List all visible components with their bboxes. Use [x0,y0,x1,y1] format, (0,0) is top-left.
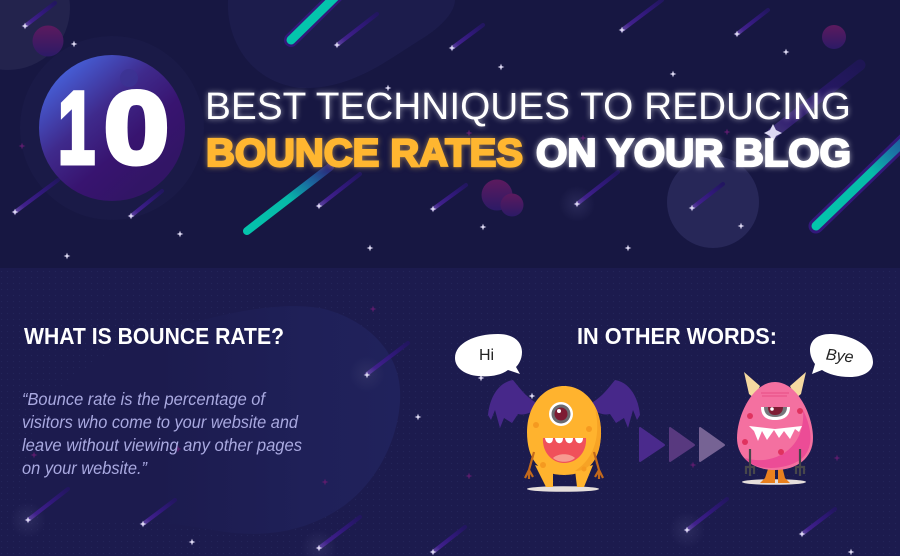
lower panel blob shape [29,306,400,534]
background: lower band [0,268,900,556]
title line 1: BEST TECHNIQUES TO REDUCING [205,86,851,128]
number badge planet with 10 [39,55,185,201]
pink one-eyed monster: bye [737,372,813,485]
heading: what is bounce rate: WHAT IS BOUNCE RATE? [24,323,284,349]
speech bubble: Hi [455,334,522,376]
quote text block: “Bounce rate is the percentage of [22,389,267,409]
pink sparkle stars [19,129,840,485]
quote text block: visitors who come to your website and [22,412,299,432]
yellow one-eyed monster: hi [488,380,640,492]
number badge planet with 10: 0 [104,71,169,185]
title line 2: on your blog: ON YOUR BLOG [536,132,851,175]
background dot texture [0,268,900,556]
speech bubble: Bye [810,334,873,377]
teal meteor right [816,140,900,226]
quote text block: leave without viewing any other pages [22,435,302,455]
speech bubble: Hi: Hi [479,347,494,364]
quote text block: on your website.” [22,458,148,478]
glow halos behind shooting stars [10,186,705,556]
teal meteor top centre [291,0,340,40]
title line 2: bounce rates: BOUNCE RATES [206,132,523,175]
three progress arrows [640,428,724,461]
number badge planet with 10: 1 [58,71,95,185]
speech bubble: Bye: Bye [825,347,854,366]
header background planets and blobs [0,0,846,248]
teal meteor mid left [247,167,330,231]
heading: in other words: IN OTHER WORDS: [577,323,777,349]
quote text block [22,389,302,478]
background: header band [0,0,900,268]
